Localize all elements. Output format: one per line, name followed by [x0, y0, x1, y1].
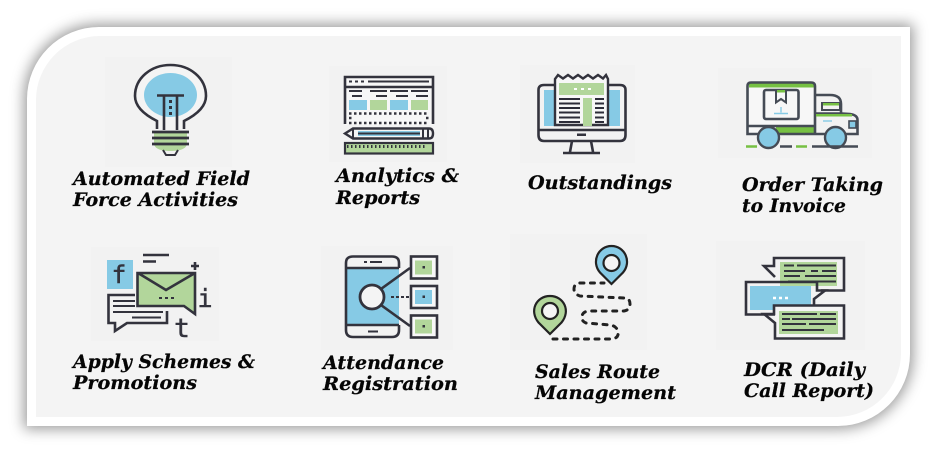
item: daily call report [716, 241, 874, 402]
label: Call Report) [744, 380, 874, 402]
icon: phone with connected nodes [321, 246, 453, 350]
icon: social messages: t [174, 314, 190, 344]
label: Force Activities [72, 189, 238, 211]
icon: delivery truck [718, 68, 872, 158]
icon: social messages: i [197, 284, 213, 313]
item: sales route management [510, 234, 676, 404]
icon: chat bubbles [716, 241, 865, 350]
icon: social messages [91, 247, 219, 344]
label: Management [534, 382, 676, 404]
label: Sales Route [535, 361, 660, 383]
icon: monitor with receipt [520, 65, 635, 163]
label: Automated Field [71, 168, 250, 190]
label: Promotions [72, 372, 197, 394]
item: automated field force activities [71, 57, 250, 211]
icon: report with pencil and ruler [329, 66, 447, 162]
label: Reports [335, 187, 420, 209]
item: order taking to invoice [718, 68, 883, 217]
label: Registration [322, 373, 458, 395]
icon: route between map pins [510, 234, 647, 350]
item: analytics and reports [329, 66, 459, 209]
icon: social messages: f [112, 261, 126, 289]
label: Apply Schemes & [71, 351, 255, 373]
item: apply schemes and promotions [71, 247, 255, 394]
label: Outstandings [528, 172, 672, 194]
label: DCR (Daily [743, 359, 867, 381]
label: Order Taking [742, 174, 883, 196]
label: to Invoice [742, 195, 846, 217]
item: outstandings [520, 65, 672, 194]
icon: light bulb [105, 57, 232, 167]
item: attendance registration [321, 246, 458, 395]
label: Attendance [321, 352, 444, 374]
label: Analytics & [334, 165, 459, 187]
